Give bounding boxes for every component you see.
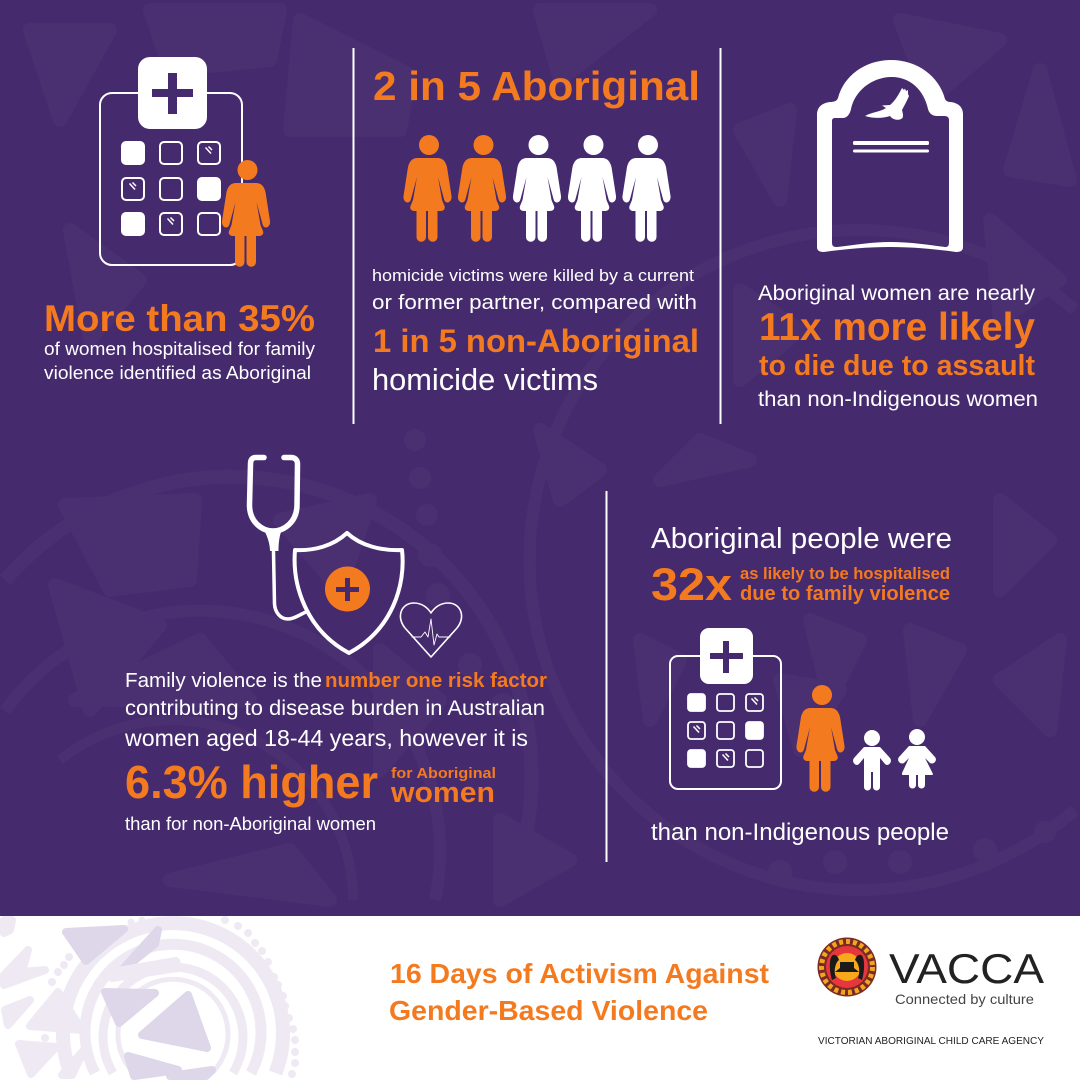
divider — [352, 48, 354, 424]
wordmark: VACCA — [889, 945, 1044, 992]
stat headline — [651, 559, 950, 610]
icon: five women, two highlighted — [403, 135, 671, 242]
icon: VACCA emblem — [818, 938, 876, 996]
intro text: Aboriginal people were — [651, 523, 952, 555]
stat headline: 11x more likely — [759, 306, 1035, 349]
campaign title: Gender-Based Violence — [389, 995, 708, 1026]
stat headline: 32x — [651, 559, 732, 610]
panel: more than 35 percent — [44, 57, 315, 383]
text outro: than non-Indigenous women — [758, 388, 1038, 411]
stat description: violence identified as Aboriginal — [44, 363, 311, 383]
panel: 32x as likely — [651, 523, 952, 846]
comparison stat: 1 in 5 non-Aboriginal — [373, 323, 699, 359]
stat headline: More than 35% — [44, 298, 315, 339]
tagline: Connected by culture — [895, 991, 1034, 1007]
stat description: of women hospitalised for family — [44, 339, 315, 359]
comparison label: homicide victims — [372, 362, 598, 397]
stat headline — [759, 306, 1035, 382]
description: contributing to disease burden in Australian — [125, 697, 545, 720]
panel: number one risk factor — [124, 458, 547, 834]
panel: 11x more likely — [758, 60, 1038, 411]
description — [372, 266, 697, 314]
stat headline: women — [390, 777, 495, 809]
campaign title: 16 Days of Activism Against — [390, 958, 769, 989]
icon: girl — [898, 729, 936, 788]
stat headline: for Aboriginal — [391, 765, 496, 782]
description: or former partner, compared with — [372, 292, 697, 314]
panel: 2 in 5 Aboriginal — [372, 63, 700, 397]
description: homicide victims were killed by a current — [372, 266, 694, 285]
stat headline: to die due to assault — [759, 350, 1035, 382]
headline: 2 in 5 Aboriginal — [373, 63, 700, 109]
description: number one risk factor — [325, 670, 547, 692]
icon: stethoscope, shield and heart — [250, 458, 462, 657]
stat headline: as likely to be hospitalised — [740, 564, 950, 583]
campaign title — [389, 958, 769, 1026]
stat headline: 6.3% higher — [125, 756, 378, 808]
stat headline: due to family violence — [740, 583, 950, 605]
description: women aged 18-44 years, however it is — [124, 725, 528, 751]
icon: boy — [853, 730, 891, 790]
stat headline — [125, 756, 496, 809]
stat description — [44, 339, 315, 383]
icon: clipboard with mother and children — [670, 628, 936, 792]
divider — [606, 491, 608, 862]
description: Family violence is the — [125, 670, 322, 692]
footer band — [0, 916, 1080, 1080]
footer dot painting decoration — [4, 916, 299, 1078]
agency name: VICTORIAN ABORIGINAL CHILD CARE AGENCY — [818, 1036, 1044, 1047]
icon: headstone with bird — [817, 60, 963, 252]
comparison text: than for non-Aboriginal women — [125, 814, 376, 834]
VACCA logo — [818, 938, 1044, 1047]
closing text: than non-Indigenous people — [651, 819, 949, 846]
divider — [720, 48, 722, 424]
icon: clipboard with woman — [100, 57, 270, 267]
description — [124, 670, 547, 751]
text intro: Aboriginal women are nearly — [758, 282, 1036, 305]
